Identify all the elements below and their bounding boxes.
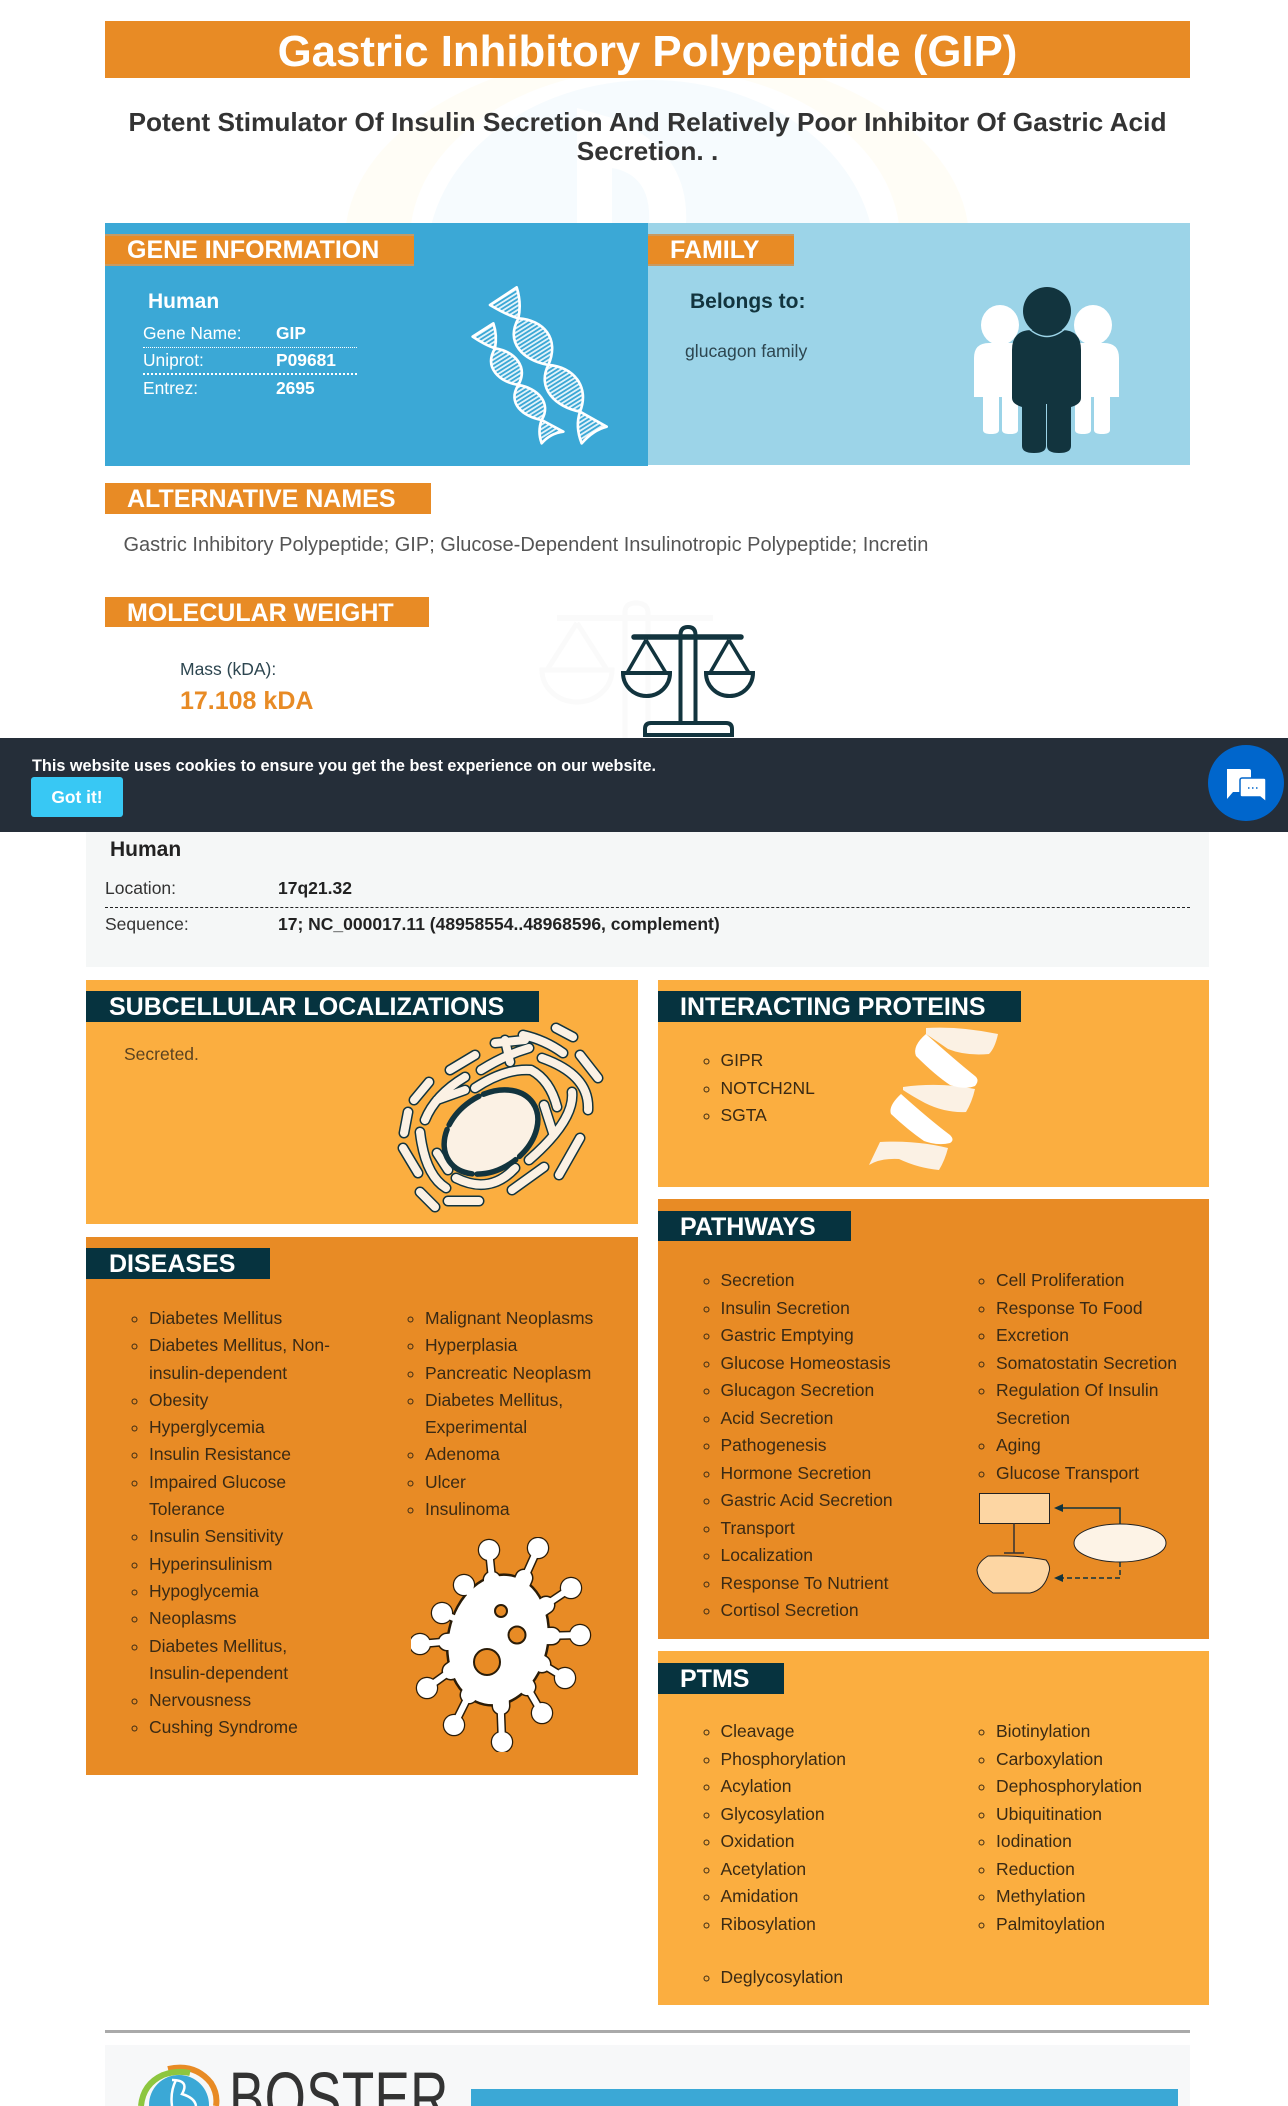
diseases list column 2: Ulcer bbox=[425, 1472, 466, 1492]
panel: family bbox=[648, 223, 1190, 465]
pathways list column 2: Excretion bbox=[996, 1325, 1069, 1345]
sequence row: 17; NC_000017.11 (48958554..48968596, complement) bbox=[278, 914, 720, 934]
icon: virus bbox=[411, 1537, 592, 1752]
diseases list column 1: Diabetes Mellitus bbox=[149, 1308, 282, 1328]
pathways list column 2: Somatostatin Secretion bbox=[996, 1352, 1177, 1372]
uniprot row bbox=[143, 348, 357, 375]
icon: endoplasmic reticulum bbox=[398, 1022, 604, 1212]
ptms list column 2: Reduction bbox=[996, 1858, 1075, 1878]
ptms list column 1: Acylation bbox=[720, 1776, 792, 1796]
heading: ptms bbox=[658, 1663, 784, 1694]
ptms list column 2: Iodination bbox=[996, 1831, 1072, 1851]
diseases list column 2: Pancreatic Neoplasm bbox=[425, 1363, 591, 1383]
heading: ptms: PTMS bbox=[680, 1665, 749, 1693]
cookie banner bbox=[0, 738, 1288, 832]
got it button: Got it! bbox=[51, 787, 103, 807]
diseases list column 1: Hyperinsulinism bbox=[149, 1554, 273, 1574]
pathways list column 1: Gastric Emptying bbox=[720, 1325, 854, 1345]
heading: pathways bbox=[658, 1211, 851, 1241]
footer blue bar bbox=[471, 2089, 1178, 2106]
species label: Human bbox=[148, 290, 219, 313]
entrez row: Entrez: bbox=[143, 378, 198, 398]
ptms list column 1: Ribosylation bbox=[720, 1914, 816, 1934]
ptms list column 1: Amidation bbox=[720, 1886, 798, 1906]
diseases list column 1: Hyperglycemia bbox=[149, 1417, 265, 1437]
diseases list column 2: Hyperplasia bbox=[425, 1335, 517, 1355]
species label: Human bbox=[110, 838, 181, 861]
pathways list column 1 bbox=[704, 1270, 893, 1620]
interacting proteins list bbox=[704, 1050, 815, 1125]
icon: protein helix ribbon bbox=[869, 1028, 998, 1170]
heading: subcellular localizations: SUBCELLULAR LOCALIZATIONS bbox=[109, 993, 504, 1021]
gene name row: Gene Name: bbox=[143, 323, 242, 343]
footer panel bbox=[105, 2045, 1190, 2106]
pathways list column 1: Glucagon Secretion bbox=[720, 1380, 874, 1400]
entrez row bbox=[143, 378, 315, 398]
pathways list column 1: Response To Nutrient bbox=[720, 1572, 888, 1592]
heading: family bbox=[648, 234, 794, 266]
diseases list column 2: Diabetes Mellitus, Experimental bbox=[425, 1390, 563, 1437]
gene name row: GIP bbox=[276, 323, 306, 343]
icon: group of people bbox=[974, 287, 1119, 453]
cookie message: This website uses cookies to ensure you get the best experience on our website. bbox=[32, 757, 656, 775]
subtitle: Potent Stimulator Of Insulin Secretion And Relatively Poor Inhibitor Of Gastric Acid Secretion. . bbox=[128, 107, 1166, 166]
title banner bbox=[105, 21, 1190, 78]
heading: gene information: GENE INFORMATION bbox=[127, 236, 379, 264]
heading: molecular weight: MOLECULAR WEIGHT bbox=[127, 599, 394, 627]
diseases list column 2: Insulinoma bbox=[425, 1499, 510, 1519]
pathways list column 1: Gastric Acid Secretion bbox=[720, 1490, 893, 1510]
entrez row: 2695 bbox=[276, 378, 315, 398]
diseases list column 1: Obesity bbox=[149, 1390, 208, 1410]
alternative names text: Gastric Inhibitory Polypeptide; GIP; Glucose-Dependent Insulinotropic Polypeptide; Incretin bbox=[124, 534, 928, 556]
location row bbox=[105, 876, 1190, 908]
uniprot row: P09681 bbox=[276, 350, 336, 370]
heading: alternative names: ALTERNATIVE NAMES bbox=[127, 485, 396, 513]
ptms list column 1 bbox=[704, 1721, 846, 1934]
gene location panel bbox=[86, 820, 1209, 967]
sequence row: Sequence: bbox=[105, 914, 189, 934]
ptms list column 2: Methylation bbox=[996, 1886, 1086, 1906]
icon: dna helix bbox=[471, 286, 608, 445]
pathways list column 2: Aging bbox=[996, 1435, 1041, 1455]
diseases list column 1: Impaired Glucose Tolerance bbox=[149, 1472, 286, 1519]
diseases list column 1: Insulin Sensitivity bbox=[149, 1526, 283, 1546]
diseases list column 1 bbox=[132, 1308, 330, 1737]
panel: diseases bbox=[86, 1237, 638, 1775]
background watermark logo bbox=[346, 78, 968, 223]
panel: interacting proteins bbox=[658, 980, 1209, 1187]
icon: balance scales bbox=[621, 625, 755, 737]
interacting proteins list: GIPR bbox=[720, 1050, 763, 1070]
pathways list column 1: Hormone Secretion bbox=[720, 1462, 871, 1482]
pathways list column 2: Response To Food bbox=[996, 1298, 1143, 1318]
belongs to label: Belongs to: bbox=[690, 290, 806, 313]
localization text: Secreted. bbox=[124, 1044, 199, 1064]
icon: boster logo bbox=[138, 2064, 220, 2106]
ptms list column 2: Palmitoylation bbox=[996, 1914, 1105, 1934]
ptms list column 2: Carboxylation bbox=[996, 1748, 1103, 1768]
pathways list column 1: Pathogenesis bbox=[720, 1435, 827, 1455]
pathways list column 1: Cortisol Secretion bbox=[720, 1600, 859, 1620]
ptms list column 1: Phosphorylation bbox=[720, 1748, 846, 1768]
ptms list column 1: Glycosylation bbox=[720, 1804, 825, 1824]
mass label: Mass (kDA): bbox=[180, 659, 276, 679]
ptms list column 1: Acetylation bbox=[720, 1858, 806, 1878]
heading: diseases bbox=[86, 1248, 270, 1279]
ptms list column 1: Cleavage bbox=[720, 1721, 794, 1741]
uniprot row: Uniprot: bbox=[143, 350, 204, 370]
pathways list column 2: Regulation Of Insulin Secretion bbox=[996, 1380, 1158, 1428]
icon: faint scales watermark bbox=[535, 600, 725, 738]
pathways list column 1: Glucose Homeostasis bbox=[720, 1352, 891, 1372]
icon: pathway diagram bbox=[976, 1493, 1166, 1594]
pathways list column 1: Transport bbox=[720, 1518, 795, 1538]
gene name row bbox=[143, 321, 357, 348]
diseases list column 1: Diabetes Mellitus, Non-insulin-dependent bbox=[149, 1335, 330, 1383]
heading: family: FAMILY bbox=[670, 236, 759, 264]
heading: pathways: PATHWAYS bbox=[680, 1213, 816, 1241]
pathways list column 1: Insulin Secretion bbox=[720, 1298, 850, 1318]
diseases list column 1: Neoplasms bbox=[149, 1608, 237, 1628]
diseases list column 1: Cushing Syndrome bbox=[149, 1717, 298, 1737]
pathways list column 1: Secretion bbox=[720, 1270, 794, 1290]
interacting proteins list: SGTA bbox=[720, 1105, 767, 1125]
diseases list column 1: Insulin Resistance bbox=[149, 1444, 291, 1464]
panel: pathways bbox=[658, 1199, 1209, 1639]
got it button bbox=[31, 777, 123, 817]
pathways list column 1: Acid Secretion bbox=[720, 1408, 833, 1428]
panel: gene information bbox=[105, 223, 648, 466]
diseases list column 2: Malignant Neoplasms bbox=[425, 1308, 593, 1328]
diseases list column 2: Adenoma bbox=[425, 1444, 500, 1464]
pathways list column 2: Glucose Transport bbox=[996, 1462, 1139, 1482]
panel: ptms bbox=[658, 1651, 1209, 2005]
footer divider bbox=[105, 2030, 1190, 2033]
mass value: 17.108 kDA bbox=[180, 687, 313, 715]
diseases list column 1: Diabetes Mellitus, Insulin-dependent bbox=[149, 1636, 288, 1683]
ptms list column 1: Oxidation bbox=[720, 1831, 794, 1851]
ptms list column 2 bbox=[978, 1721, 1142, 1934]
pathways list column 1: Localization bbox=[720, 1545, 813, 1565]
diseases list column 1: Hypoglycemia bbox=[149, 1581, 259, 1601]
location row: 17q21.32 bbox=[278, 878, 352, 898]
pathways list column 2 bbox=[978, 1270, 1177, 1482]
ptms list column 2: Ubiquitination bbox=[996, 1804, 1102, 1824]
location row: Location: bbox=[105, 878, 176, 898]
heading: interacting proteins: INTERACTING PROTEINS bbox=[680, 993, 986, 1021]
interacting proteins list: NOTCH2NL bbox=[720, 1078, 815, 1098]
diseases list column 2 bbox=[408, 1308, 593, 1519]
ptms list column 2: Biotinylation bbox=[996, 1721, 1090, 1741]
heading: diseases: DISEASES bbox=[109, 1250, 235, 1278]
title banner: Gastric Inhibitory Polypeptide (GIP) bbox=[278, 27, 1017, 76]
icon: chat bubble button bbox=[1208, 745, 1284, 821]
ptms list column 2: Dephosphorylation bbox=[996, 1776, 1142, 1796]
pathways list column 2: Cell Proliferation bbox=[996, 1270, 1124, 1290]
family value: glucagon family bbox=[685, 341, 807, 361]
diseases list column 1: Nervousness bbox=[149, 1690, 251, 1710]
ptms deglycosylation item: Deglycosylation bbox=[720, 1967, 843, 1987]
panel: subcellular localizations bbox=[86, 980, 638, 1224]
